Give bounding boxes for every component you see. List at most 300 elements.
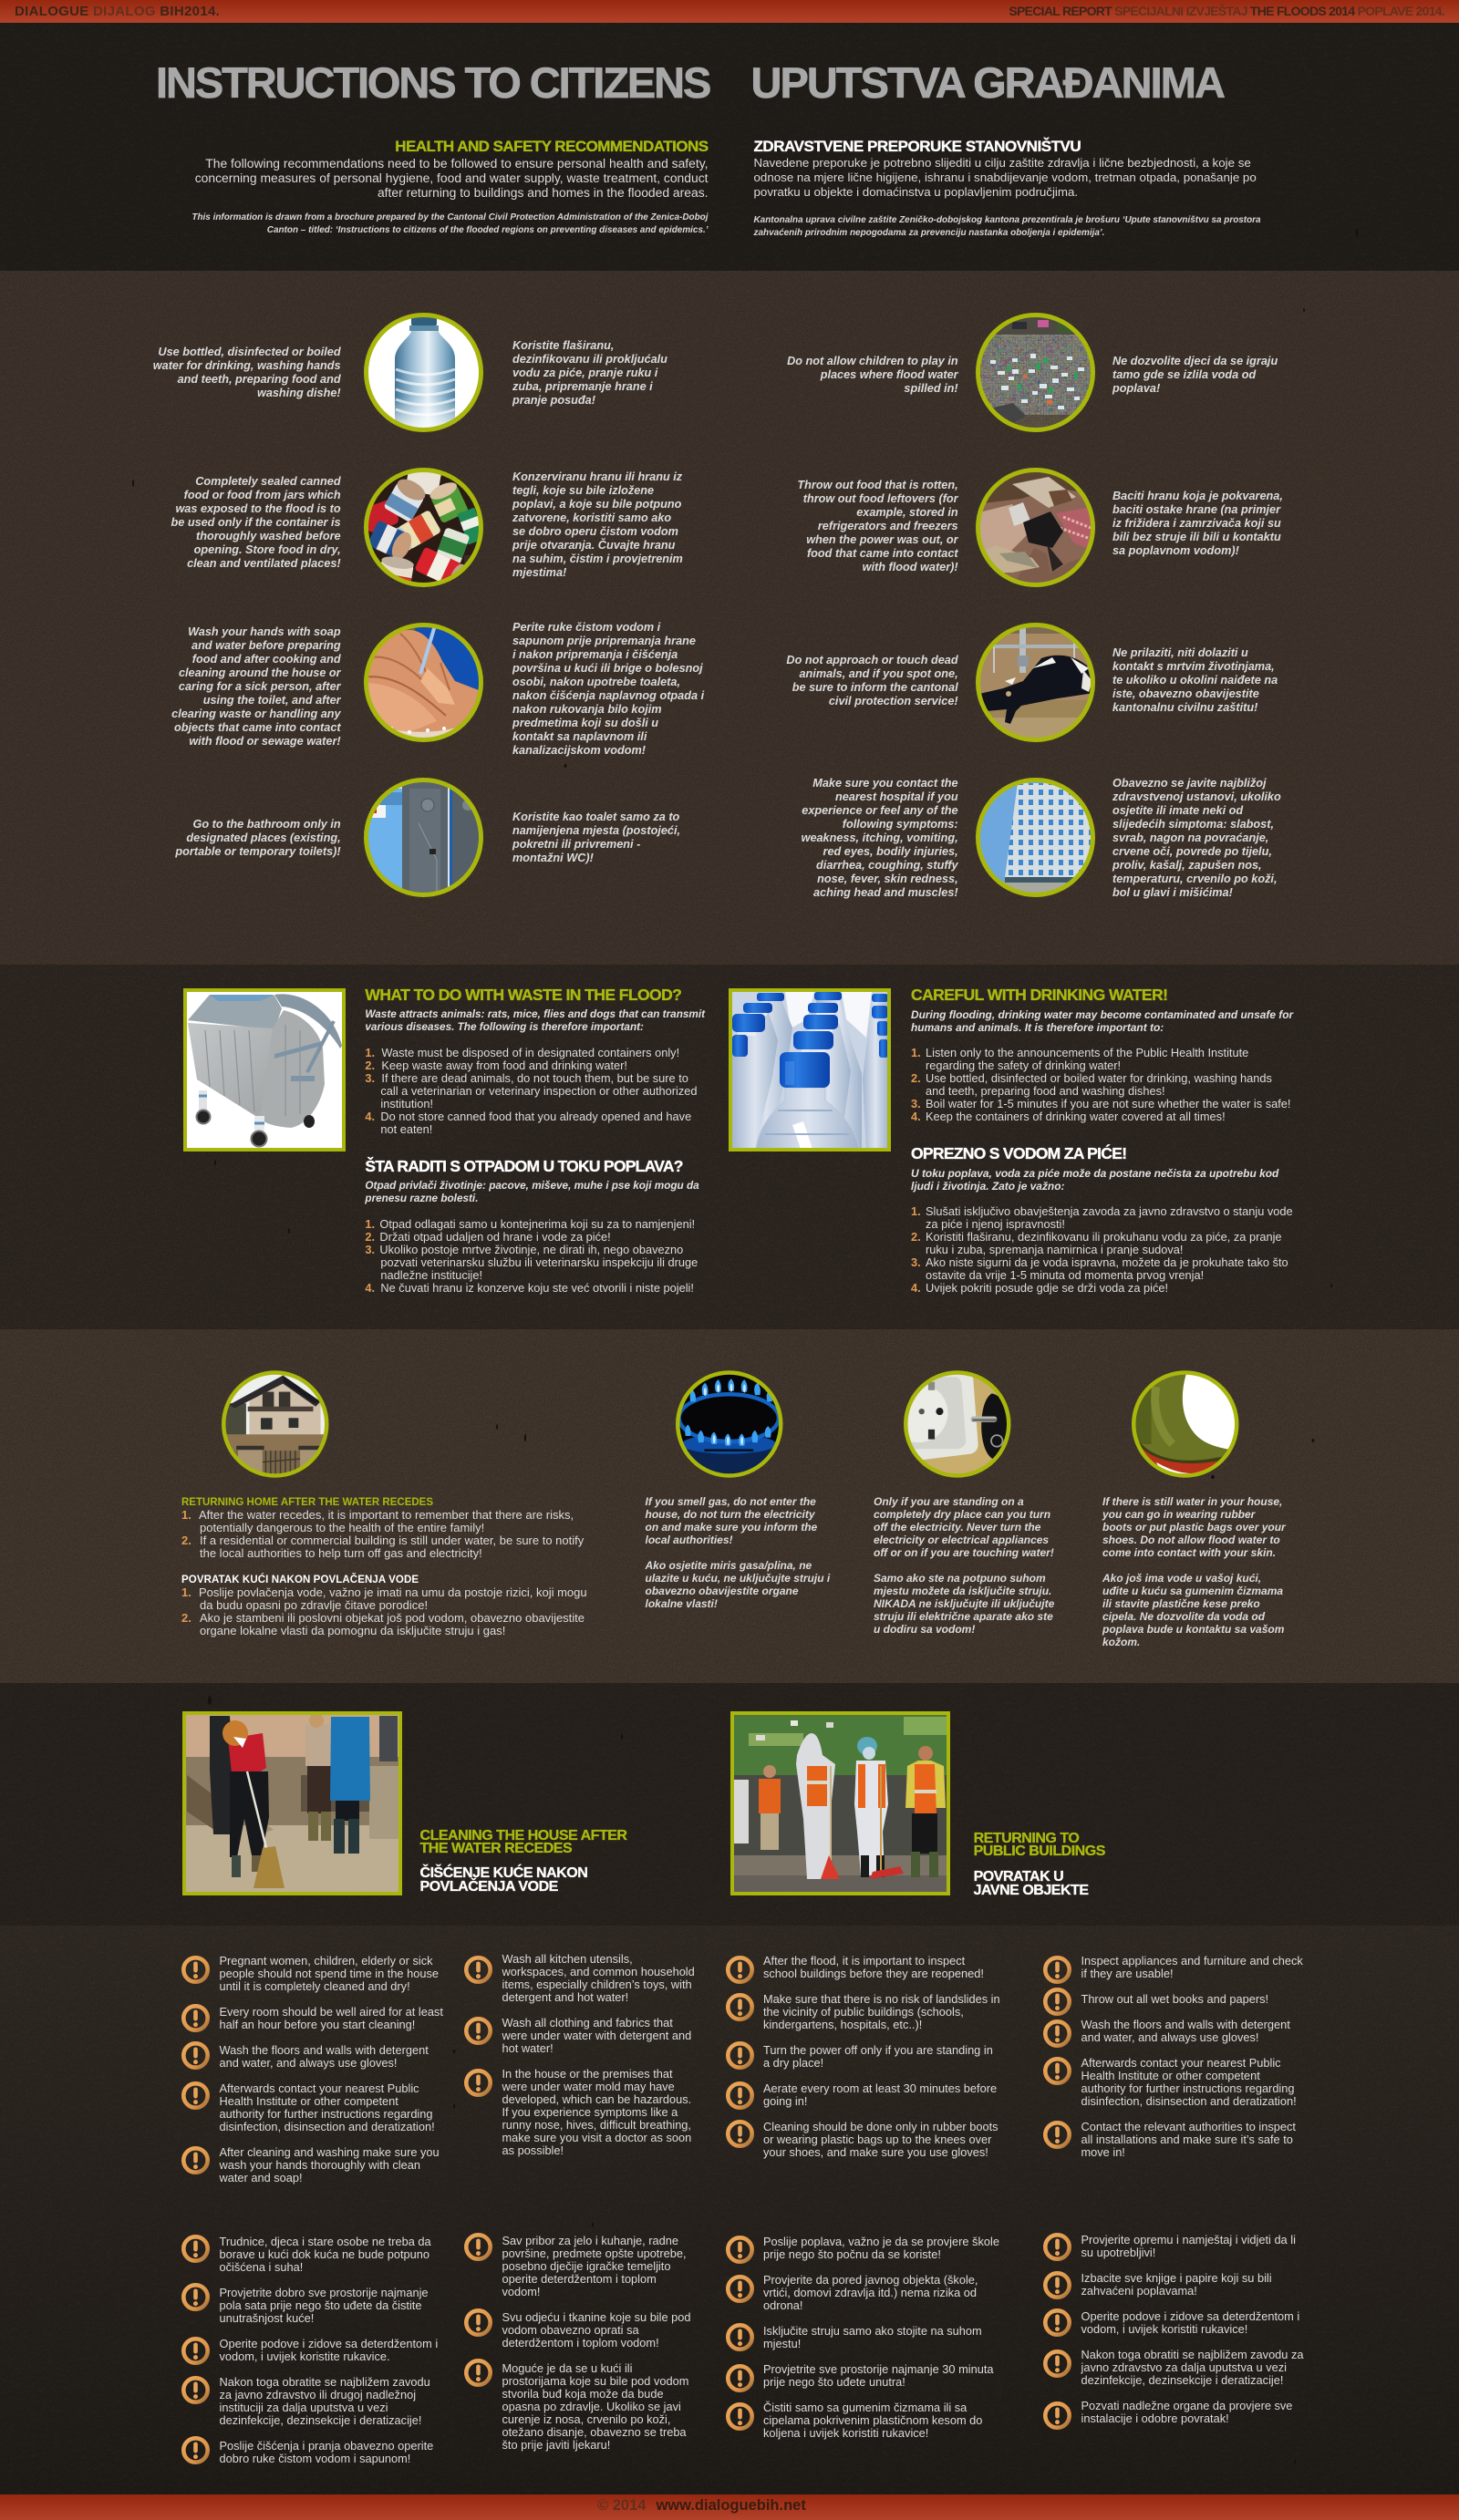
alert item: Turn the power off only if you are standing in	[763, 2043, 993, 2057]
gas warning text: on and make sure you inform the	[646, 1521, 817, 1534]
tip 1 English: washing dishe!	[257, 387, 341, 399]
alert item	[1043, 2121, 1296, 2159]
tip 3 English: clearing waste or handling any	[171, 707, 341, 720]
alert item: dezinfekcije, dezinsekcije i deratizacije!	[1081, 2373, 1283, 2387]
returning home text: After the water recedes, it is important to remember that there are risks,	[199, 1508, 574, 1522]
tip 6 English: when the power was out, or	[806, 532, 958, 545]
panel: section headers with photos: POVLAČENJA VODE	[419, 1879, 558, 1895]
icon: exclamation	[726, 2364, 753, 2392]
heading: drinking water Bosnian: OPREZNO S VODOM ZA PIĆE!	[911, 1144, 1126, 1162]
alert item	[1043, 2233, 1296, 2261]
intro paragraph Bosnian: povratku u objekte i domaćinstva u poplavljenim područjima.	[753, 185, 1078, 199]
waste list English: Waste must be disposed of in designated containers only!	[381, 1046, 679, 1059]
rubber boots text: poplava bude u kontaktu sa vašom	[1102, 1623, 1284, 1636]
tip 2 English: Completely sealed canned	[195, 474, 341, 487]
tip 7 English: animals, and if you spot one,	[799, 667, 958, 680]
alert item	[726, 2236, 999, 2264]
tip 5 Bosnian	[1112, 355, 1278, 396]
tip 3 English: food and after cooking and	[192, 653, 341, 666]
photo: waste container	[183, 988, 346, 1152]
alert item: people should not spend time in the house	[219, 1967, 439, 1980]
drinking water intro English: humans and animals. It is therefore important to:	[911, 1021, 1164, 1034]
tip 2 Bosnian: tegli, koje su bile izložene	[512, 483, 654, 496]
tip 6 Bosnian: bili bez struje ili bili u kontaktu	[1112, 531, 1281, 543]
alert item: kindergartens, hospitals, etc..)!	[763, 2018, 922, 2031]
alert item: until it is completely cleaned and dry!	[219, 1979, 410, 1993]
alert item: Afterwards contact your nearest Public	[219, 2081, 419, 2095]
panel: section headers with photos: ČIŠĆENJE KUĆE NAKON	[419, 1865, 587, 1881]
tip 3 Bosnian: i nakon pripremanja i čišćenja	[512, 647, 678, 660]
icon: exclamation	[464, 1956, 492, 1984]
drinking water intro English: During flooding, drinking water may become contaminated and unsafe for	[911, 1008, 1293, 1021]
alert item	[181, 2041, 429, 2070]
heading: zdravstvene preporuke: ZDRAVSTVENE PREPORUKE STANOVNIŠTVU	[753, 138, 1081, 155]
alert item: developed, which can be hazardous.	[502, 2092, 691, 2106]
alert item	[464, 2308, 691, 2350]
waste intro Bosnian	[365, 1180, 699, 1205]
icon: exclamation	[181, 2283, 210, 2311]
alert item	[1043, 2349, 1304, 2387]
returning home text: 2.	[181, 1534, 191, 1547]
tip 6 Bosnian: Baciti hranu koja je pokvarena,	[1112, 489, 1283, 501]
tip 3 Bosnian: predmetima koji su došli u	[512, 717, 658, 729]
alert item	[464, 1953, 695, 2004]
tip 6 Bosnian: sa poplavnom vodom)!	[1112, 543, 1239, 556]
alert item: school buildings before they are reopened!	[763, 1967, 984, 1980]
tip 8 Bosnian: svrab, nagon na povraćanje,	[1112, 831, 1268, 844]
tip 3 Bosnian: površina u kući ili brige o bolesnoj	[512, 662, 703, 675]
icon: exclamation	[181, 2004, 210, 2032]
rubber boots text: you can go in wearing rubber	[1102, 1508, 1255, 1521]
alert item	[1043, 2271, 1272, 2299]
waste list Bosnian: 4.	[365, 1281, 375, 1295]
tip 7 Bosnian: kontakt s mrtvim životinjama,	[1112, 660, 1275, 673]
alert item: cipelama pokrivenim plastičnom kesom do	[763, 2413, 982, 2427]
panel: instruction lists	[0, 1926, 1459, 2494]
alert item: disinfection, disinsection and deratization!	[1081, 2094, 1297, 2108]
waste list English: Do not store canned food that you already opened and have	[380, 1110, 691, 1123]
icon: exclamation	[726, 2081, 753, 2110]
tip 8 Bosnian: proliv, kašalj, zapušen nos,	[1112, 859, 1262, 872]
icon: flood debris photo	[976, 313, 1095, 432]
tip 4 English	[175, 817, 341, 859]
tip 4 English: designated places (existing,	[186, 831, 341, 844]
drinking water list Bosnian: 1.	[911, 1204, 921, 1218]
rubber boots text: kožom.	[1102, 1636, 1140, 1648]
returning home text: potentially dangerous to the health of the entire family!	[200, 1521, 484, 1534]
returning home text: 1.	[181, 1508, 191, 1522]
header left: publication name: DIALOGUE DIJALOG BIH2014.	[15, 4, 220, 19]
alert item: Sav pribor za jelo i kuhanje, radne	[502, 2234, 678, 2247]
tip 1 English	[153, 345, 341, 399]
alert item: što prije javiti ljekaru!	[502, 2438, 610, 2452]
tip 8 English: experience or feel any of the	[802, 804, 958, 817]
tip 1 English: and teeth, preparing food and	[178, 372, 341, 385]
alert item	[181, 2235, 431, 2274]
tip 4 Bosnian: namijenjena mjesta (postojeći,	[512, 824, 680, 837]
tip 3 English: Wash your hands with soap	[188, 625, 341, 638]
tip 6 English: example, stored in	[856, 505, 958, 518]
alert item: Pregnant women, children, elderly or sick	[219, 1954, 433, 1967]
gas warning text	[646, 1495, 830, 1610]
alert item	[1043, 2019, 1290, 2048]
icon: exclamation	[1043, 2308, 1071, 2337]
rubber boots text: uđite u kuću sa gumenim čizmama	[1102, 1585, 1283, 1597]
icon: exclamation	[464, 2308, 492, 2337]
alert item: očišćena i suha!	[219, 2260, 303, 2274]
icon: exclamation	[1043, 2233, 1071, 2261]
tip 7 English: be sure to inform the cantonal	[792, 680, 958, 693]
alert item: dezinfekcije, dezinsekcije i deratizacije!	[219, 2413, 421, 2427]
tip 2 Bosnian	[512, 470, 683, 580]
gas warning text: house, do not turn the electricity	[646, 1508, 815, 1521]
tip 6 English	[797, 478, 958, 574]
source note English: Canton – titled: ‘Instructions to citizens of the flooded regions on preventing diseases and epidemics.’	[267, 225, 708, 235]
drinking water intro English	[911, 1008, 1293, 1034]
panel: section headers with photos: POVRATAK U	[974, 1869, 1063, 1885]
tip 5 English: spilled in!	[904, 382, 958, 395]
rubber boots text: If there is still water in your house,	[1102, 1495, 1282, 1508]
tip 8 English: nearest hospital if you	[835, 790, 958, 802]
icon: exclamation	[464, 2233, 492, 2261]
alert item: Wash all kitchen utensils,	[502, 1952, 633, 1966]
alert item: vrtići, domovi zdravlja itd.) nema rizika od	[763, 2286, 977, 2299]
alert item: operite deterdžentom i toplom	[502, 2272, 657, 2286]
drinking water list English: Use bottled, disinfected or boiled water for drinking, washing hands	[926, 1071, 1272, 1085]
tip 2 English: be used only if the container is	[171, 516, 341, 529]
alert item: Isključite struju samo ako stojite na suhom	[763, 2324, 982, 2338]
alert item: your shoes, and make sure you use gloves!	[763, 2145, 988, 2159]
alert item: vodom, i uvijek koristiti rukavice!	[1081, 2322, 1247, 2336]
tip 4 English: portable or temporary toilets)!	[175, 844, 341, 857]
alert item: Nakon toga obratite se najbližem zavodu	[219, 2375, 430, 2389]
alert item: Trudnice, djeca i stare osobe ne treba da	[219, 2235, 431, 2248]
alert item: In the house or the premises that	[502, 2067, 673, 2081]
rubber boots text: shoes. Do not allow flood water to	[1102, 1534, 1280, 1546]
gas warning text: Ako osjetite miris gasa/plina, ne	[646, 1559, 812, 1572]
alert item	[726, 1955, 984, 1984]
waste list English: call a veterinarian or veterinary inspection or other authorized	[380, 1084, 698, 1098]
drinking water list English: Keep the containers of drinking water covered at all times!	[926, 1110, 1226, 1123]
rubber boots text: boots or put plastic bags over your	[1102, 1521, 1286, 1534]
icon: exclamation	[726, 1993, 753, 2021]
panel: returning home	[181, 1370, 1286, 1648]
panel: section headers with photos: JAVNE OBJEKTE	[974, 1882, 1089, 1898]
tip 8 Bosnian: Obavezno se javite najbližoj	[1112, 777, 1267, 790]
gas warning text: obavezno obavijestite organe	[646, 1585, 799, 1597]
tip 3 English: objects that came into contact	[174, 720, 341, 733]
tip 3 Bosnian	[512, 620, 704, 757]
alert item	[181, 2436, 433, 2465]
tip 2 Bosnian: zatvorene, koristiti samo ako	[512, 511, 671, 523]
tip 1 Bosnian: pranje posuđa!	[512, 394, 595, 407]
alert item: and water, and always use gloves!	[1081, 2030, 1258, 2044]
drinking water list Bosnian: Uvijek pokriti posude gdje se drži voda za piće!	[926, 1281, 1168, 1295]
alert item	[1043, 2057, 1297, 2108]
alert item: move in!	[1081, 2145, 1125, 2159]
tip 1 English: water for drinking, washing hands	[153, 359, 341, 372]
tip 6 English: food that came into contact	[807, 547, 958, 560]
electricity warning text: completely dry place can you turn	[874, 1508, 1050, 1521]
source note Bosnian	[753, 215, 1261, 238]
tip 2 Bosnian: Konzerviranu hranu ili hranu iz	[512, 470, 682, 483]
footer credit and website: © 2014 www.dialoguebih.net	[597, 2497, 806, 2514]
alert item: Čistiti samo sa gumenim čizmama ili sa	[763, 2401, 967, 2414]
waste intro Bosnian: prenesu razne bolesti.	[365, 1193, 478, 1204]
tip 8 English: nose, fever, skin redness,	[817, 872, 958, 884]
alert item: opasna po zdravlje. Ukoliko se javi	[502, 2400, 681, 2413]
drinking water list Bosnian	[911, 1205, 1293, 1295]
icon: flooded house photo	[222, 1370, 328, 1478]
source note Bosnian: zahvaćenih prirodnim nepogodama za prevenciju nastanka oboljenja i epidemija’.	[753, 228, 1104, 238]
tip 2 Bosnian: se dobro operu čistom vodom	[512, 525, 678, 538]
alert item	[464, 2233, 687, 2298]
icon: exclamation	[726, 2402, 753, 2431]
section heading: cleaning the house: THE WATER RECEDES	[419, 1841, 572, 1856]
icon: exclamation	[181, 2081, 210, 2110]
alert item	[464, 2068, 691, 2157]
tip 5 Bosnian: poplava!	[1112, 382, 1160, 395]
returning home text: organe lokalne vlasti da pomognu da isključite struju i gas!	[200, 1624, 505, 1637]
alert item: as possible!	[502, 2143, 564, 2157]
drinking water list English: Listen only to the announcements of the Public Health Institute	[926, 1046, 1248, 1059]
waste list Bosnian: Ne čuvati hranu iz konzerve koju ste već otvorili i niste pojeli!	[380, 1281, 694, 1295]
tip 8 English: diarrhea, coughing, stuffy	[816, 859, 958, 872]
rubber boots text	[1102, 1495, 1286, 1648]
electricity warning text: Only if you are standing on a	[874, 1495, 1024, 1508]
alert item	[464, 2359, 688, 2452]
alert item: deterdžentom i toplom vodom!	[502, 2336, 659, 2350]
tip 2 English	[171, 474, 341, 571]
icon: exclamation	[1043, 2401, 1071, 2430]
icon: hospital building photo	[976, 778, 1095, 897]
alert item	[726, 2363, 994, 2392]
icon: exclamation	[464, 2359, 492, 2387]
tip 4 Bosnian: pokretni ili privremeni -	[512, 837, 640, 850]
waste intro Bosnian: Otpad privlači životinje: pacove, miševe, muhe i pse koji mogu da	[365, 1180, 699, 1192]
alert item: disinfection, disinsection and deratization!	[219, 2120, 435, 2133]
alert item	[181, 2146, 440, 2184]
tip 3 Bosnian: osobi, nakon upotrebe toaleta,	[512, 675, 680, 687]
icon: electric socket photo	[904, 1370, 1010, 1478]
icon: exclamation	[181, 2376, 210, 2404]
tip 8 Bosnian: bol u glavi i mišićima!	[1112, 886, 1233, 899]
tip 8 Bosnian	[1112, 777, 1281, 899]
alert item	[726, 2041, 993, 2070]
drinking water intro Bosnian: ljudi i životinja. Zato je važno:	[911, 1180, 1064, 1193]
gas warning text: lokalne vlasti!	[646, 1597, 718, 1610]
alert item: instalacije i odobre povratak!	[1081, 2412, 1229, 2425]
icon: exclamation	[726, 2041, 753, 2070]
tip 8 Bosnian: crvene oči, povrede po tijelu,	[1112, 844, 1272, 857]
intro paragraph English: after returning to buildings and homes in the flooded areas.	[378, 185, 708, 200]
drinking water list Bosnian: za piće i njenoj ispravnosti!	[926, 1217, 1065, 1231]
tip 7 Bosnian: kantonalnu civilnu zaštitu!	[1112, 700, 1257, 713]
alert item: Provjerite opremu i namještaj i vidjeti da li	[1081, 2233, 1296, 2246]
waste intro English: various diseases. The following is therefore important:	[365, 1021, 644, 1033]
alert item: runny nose, hives, difficult breathing,	[502, 2118, 691, 2132]
icon: exclamation	[1043, 2271, 1071, 2299]
alert item: prostorijama koje su bile pod vodom	[502, 2374, 688, 2388]
photo: cleaning street	[182, 1711, 402, 1895]
tip 2 English: opening. Store food in dry,	[194, 543, 341, 556]
waste list Bosnian: Otpad odlagati samo u kontejnerima koji su za to namjenjeni!	[379, 1217, 695, 1231]
drinking water list English: Boil water for 1-5 minutes if you are not sure whether the water is safe!	[926, 1097, 1290, 1110]
alert item: or wearing plastic bags up to the knees over	[763, 2133, 991, 2146]
alert item: hot water!	[502, 2041, 554, 2055]
alert item: Health Institute or other competent	[1081, 2069, 1260, 2082]
alert item: authority for further instructions regarding	[219, 2107, 433, 2121]
alert item: After cleaning and washing make sure you	[219, 2145, 440, 2159]
alert item: Poslije poplava, važno je da se provjere škole	[763, 2235, 999, 2248]
returning home text: da budu opasni po zdravlje čitave porodice!	[200, 1598, 428, 1612]
heading: waste English: WHAT TO DO WITH WASTE IN THE FLOOD?	[365, 986, 681, 1004]
icon: exclamation	[726, 2120, 753, 2148]
tip 5 Bosnian: Ne dozvolite djeci da se igraju	[1112, 355, 1278, 367]
intro paragraph English: concerning measures of personal hygiene, food and water supply, waste treatment, conduct	[195, 170, 708, 185]
tip 2 English: clean and ventilated places!	[187, 556, 341, 569]
tip 3 English: and water before preparing	[191, 638, 341, 651]
drinking water list Bosnian: 2.	[911, 1230, 921, 1244]
drinking water list English: 1.	[911, 1046, 921, 1059]
waste list English: If there are dead animals, do not touch them, but be sure to	[381, 1071, 688, 1085]
alert item: If you experience symptoms like a	[502, 2105, 678, 2119]
source note Bosnian: Kantonalna uprava civilne zaštite Zeničko-dobojskog kantona prezentirala je brošuru ‘Upute stanovništvu sa prostora	[753, 215, 1261, 225]
alert item	[726, 2323, 982, 2351]
icon: exclamation	[181, 2436, 210, 2464]
alert item: Inspect appliances and furniture and check	[1081, 1954, 1303, 1967]
panel: title and introduction	[156, 58, 1261, 238]
alert item: items, especially children’s toys, with	[502, 1978, 692, 1991]
tip 4 English: Go to the bathroom only in	[193, 817, 341, 830]
drinking water list English: 4.	[911, 1110, 921, 1123]
intro paragraph Bosnian: odnose na mjere lične higijene, ishranu i snabdijevanje vodom, tretman otpada, ponašanje po	[753, 170, 1257, 184]
electricity warning text	[874, 1495, 1054, 1636]
electricity warning text: off or on if you are touching water!	[874, 1546, 1054, 1559]
drinking water list Bosnian: Koristiti flaširanu, dezinfikovanu ili prokuhanu vodu za piće, za pranje	[926, 1230, 1282, 1244]
alert item: Operite podove i zidove sa deterdžentom i	[219, 2337, 438, 2350]
tip 6 Bosnian: baciti ostake hrane (na primjer	[1112, 503, 1280, 516]
waste list English: 2.	[365, 1059, 375, 1072]
alert item: posebno dječije igračke temeljito	[502, 2259, 670, 2273]
returning home text: Ako je stambeni ili poslovni objekat još pod vodom, obavezno obavijestite	[200, 1611, 585, 1625]
tip 2 English: was exposed to the flood is to	[175, 501, 341, 514]
alert item: odrona!	[763, 2298, 802, 2312]
returning home text: 2.	[181, 1611, 191, 1625]
title: Bosnian: UPUTSTVA GRAĐANIMA	[751, 58, 1224, 107]
alert item: koljena i uvijek koristiti rukavice!	[763, 2426, 928, 2440]
heading: drinking water English: CAREFUL WITH DRINKING WATER!	[911, 986, 1167, 1004]
icon: exclamation	[1043, 1988, 1071, 2016]
icon: exclamation	[1043, 2350, 1071, 2378]
tip 1 Bosnian: Koristite flaširanu,	[512, 339, 614, 352]
tip 8 English: following symptoms:	[843, 817, 958, 830]
panel: eight illustrated tips	[153, 313, 1283, 899]
alert item: Aerate every room at least 30 minutes before	[763, 2081, 997, 2095]
alert item: were under water with detergent and	[502, 2029, 691, 2042]
alert item: dobro ruke čistom vodom i sapunom!	[219, 2452, 410, 2465]
icon: exclamation	[1043, 2121, 1071, 2149]
alert item	[181, 1955, 439, 1993]
tip 3 English	[171, 625, 341, 748]
tip 7 English	[786, 653, 958, 707]
icon: exclamation	[726, 2275, 753, 2303]
rubber boots text: cipela. Ne dozvolite da voda od	[1102, 1610, 1265, 1623]
alert item: Afterwards contact your nearest Public	[1081, 2056, 1281, 2070]
tip 8 English: red eyes, bodily injuries,	[823, 844, 958, 857]
alert item: Poslije čišćenja i pranja obavezno operite	[219, 2439, 433, 2453]
alert item	[181, 2081, 435, 2133]
waste list Bosnian: Držati otpad udaljen od hrane i vode za piće!	[379, 1230, 611, 1244]
tip 6 Bosnian	[1112, 489, 1283, 558]
alert item: if they are usable!	[1081, 1967, 1174, 1980]
alert item: going in!	[763, 2094, 807, 2108]
alert item: Provjetrite dobro sve prostorije najmanje	[219, 2286, 429, 2299]
title: English: INSTRUCTIONS TO CITIZENS	[156, 58, 709, 107]
drinking water list English: 2.	[911, 1071, 921, 1085]
icon: exclamation	[726, 2236, 753, 2264]
drinking water list English: 3.	[911, 1097, 921, 1110]
alert item: otežano disanje, obavezno se treba	[502, 2425, 687, 2439]
returning home text	[181, 1495, 587, 1637]
photo: workers in protective gear	[730, 1711, 950, 1895]
icon: gas burner photo	[676, 1370, 782, 1478]
drinking water list Bosnian: 4.	[911, 1281, 921, 1295]
alert item: Make sure that there is no risk of landslides in	[763, 1992, 1000, 2006]
icon: exclamation	[181, 2146, 210, 2174]
alert item	[726, 2120, 999, 2159]
electricity warning text: electricity or electrical appliances	[874, 1534, 1049, 1546]
alert item: vodom!	[502, 2285, 540, 2298]
alert item	[726, 2401, 982, 2440]
alert item	[181, 2376, 430, 2427]
alert item: javno zdravstvo za dalja uputstva u vezi	[1081, 2360, 1287, 2374]
photo: water bottles	[729, 988, 891, 1152]
alert item: Izbacite sve knjige i papire koji su bili	[1081, 2271, 1272, 2285]
returning home text: 1.	[181, 1585, 191, 1599]
tip 2 Bosnian: mjestima!	[512, 565, 566, 578]
alert item: wash your hands thoroughly with clean	[219, 2158, 420, 2172]
tip 5 Bosnian: tamo gde se izlila voda od	[1112, 368, 1256, 381]
tip 2 English: thoroughly washed before	[196, 529, 341, 542]
tip 3 English: with flood or sewage water!	[189, 735, 341, 748]
alert item: Every room should be well aired for at least	[219, 2005, 443, 2019]
drinking water list Bosnian: Ako niste sigurni da je voda ispravna, možete da je prokuhate tako što	[926, 1255, 1288, 1269]
waste list English: 3.	[365, 1071, 375, 1085]
intro paragraph English	[195, 156, 708, 200]
rubber boots text: come into contact with your skin.	[1102, 1546, 1276, 1559]
icon: rotten food photo	[976, 468, 1095, 587]
section heading: returning to public buildings	[974, 1833, 1120, 1871]
waste list English: not eaten!	[380, 1122, 432, 1136]
drinking water list Bosnian: ostavite da vrije 1-5 minuta od momenta prvog vrenja!	[926, 1268, 1204, 1282]
waste list Bosnian: pozvati veterinarsku službu ili veterinarsku inspekciju ili druge	[380, 1255, 698, 1269]
tip 3 Bosnian: sapunom prije pripremanja hrane	[512, 635, 696, 647]
icon: dead animal photo	[976, 623, 1095, 742]
waste list Bosnian: Ukoliko postoje mrtve životinje, ne dirati ih, nego obavezno	[379, 1243, 683, 1256]
tip 1 Bosnian: dezinfikovanu ili prokljućalu	[512, 353, 667, 366]
tip 6 English: with flood water)!	[863, 560, 958, 573]
alert item: za javno zdravstvo ili drugoj nadležnoj	[219, 2388, 416, 2401]
panel: section headers with photos	[0, 1683, 1459, 1926]
tip 1 Bosnian: vodu za piće, pranje ruku i	[512, 367, 657, 379]
alert item: prije nego što počnu da se koriste!	[763, 2247, 941, 2261]
alert item: pola sata prije nego što uđete da čistite	[219, 2298, 421, 2312]
drinking water intro Bosnian: U toku poplava, voda za piće može da postane nečista za upotrebu kod	[911, 1167, 1278, 1180]
alert item: workspaces, and common household	[502, 1965, 695, 1978]
waste list English: 4.	[365, 1110, 375, 1123]
tip 3 English: cleaning around the house or	[179, 666, 341, 678]
